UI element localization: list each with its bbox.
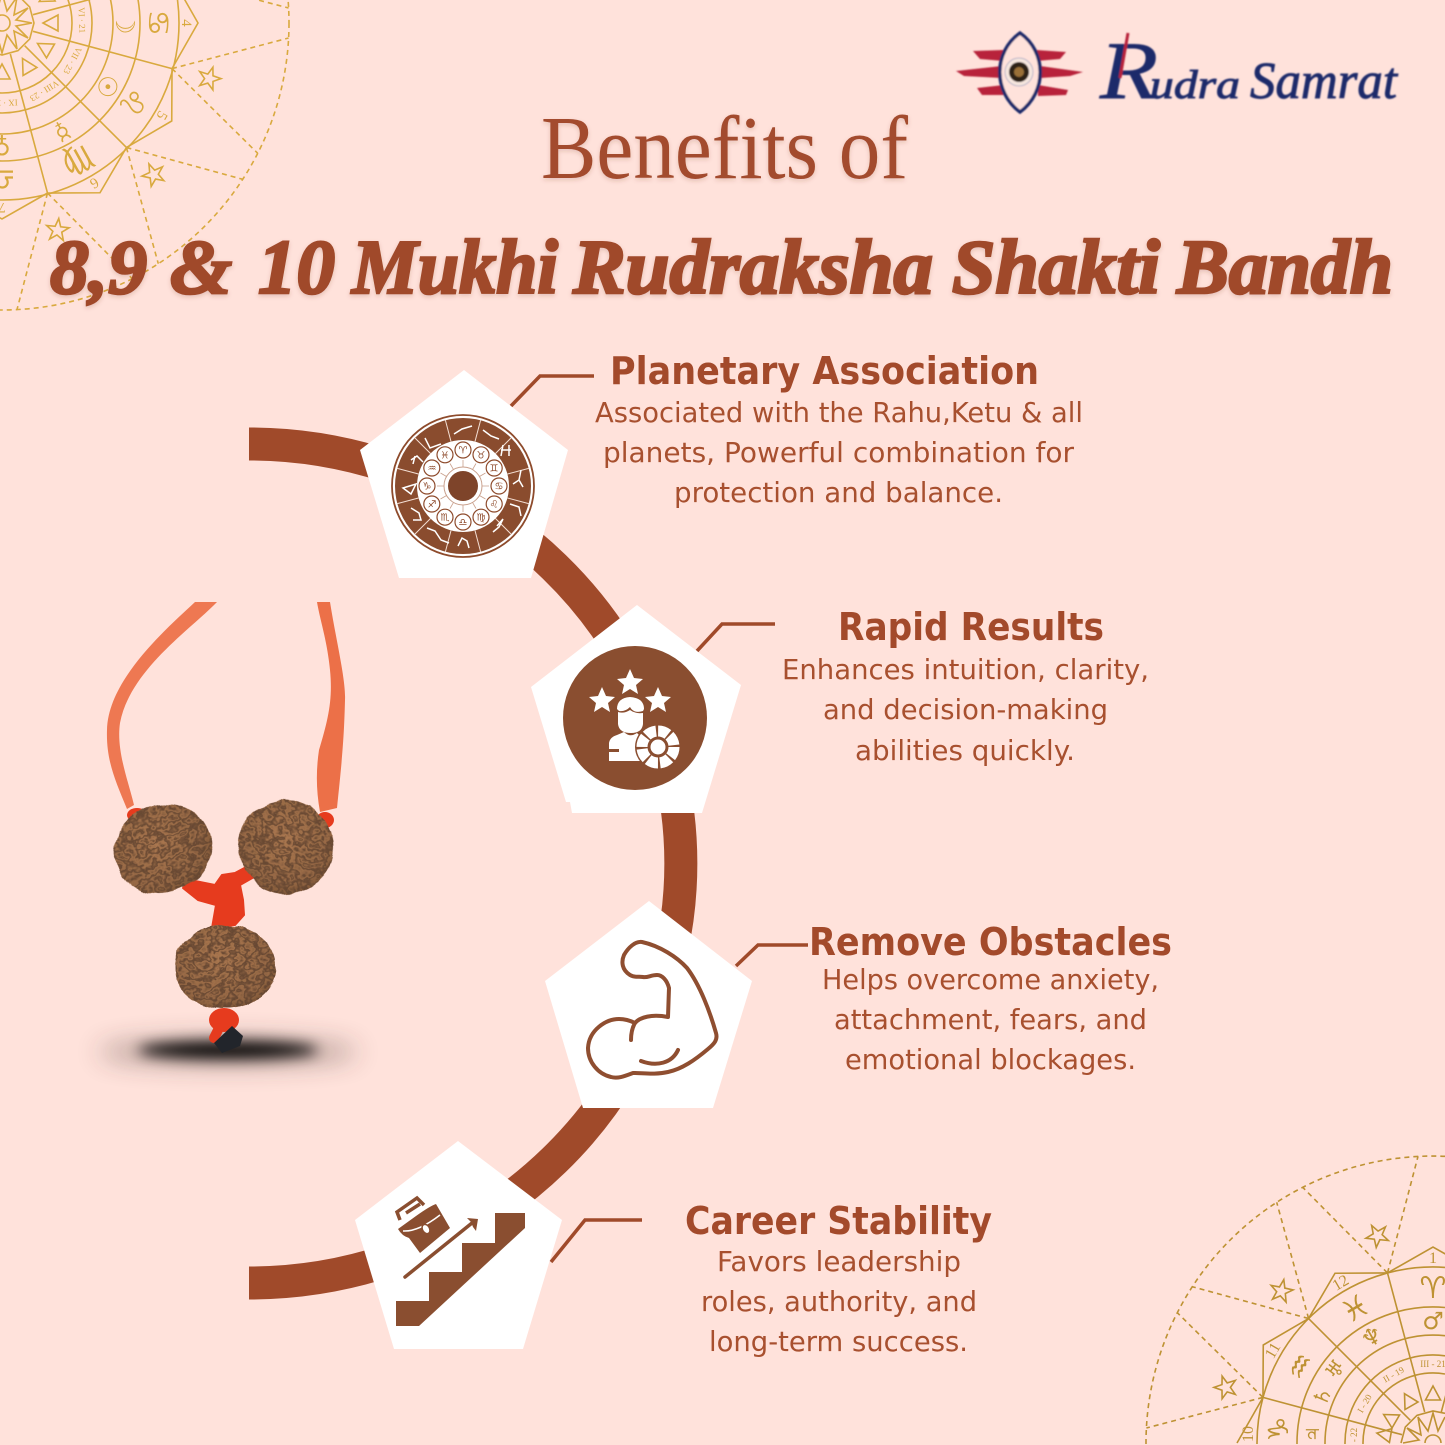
icon: zodiac wheel: ♐ bbox=[428, 500, 436, 510]
logo emblem bbox=[956, 33, 1083, 112]
logo: Rudra Samrat bbox=[956, 25, 1399, 116]
knots bbox=[127, 808, 334, 1038]
panel: Planetary Association bbox=[360, 349, 1083, 578]
icon: zodiac wheel: ♋ bbox=[495, 482, 503, 492]
icon: person with stars and gear bbox=[563, 646, 707, 790]
ground shadow bbox=[98, 1039, 358, 1065]
title line 2: Bandh bbox=[1176, 224, 1393, 310]
icon: zodiac wheel: ♊ bbox=[490, 464, 499, 474]
astrology wheel: top left: ☿ bbox=[49, 116, 75, 147]
astrology wheel: bottom right: II - 19 bbox=[1381, 1364, 1406, 1385]
heading: Remove Obstacles bbox=[809, 920, 1172, 964]
body text bbox=[701, 1245, 977, 1358]
astrology wheel: bottom right: ♑ bbox=[1262, 1416, 1295, 1442]
body text bbox=[595, 396, 1083, 509]
product photo: rudraksha bandh bbox=[98, 602, 358, 1065]
icon: zodiac wheel: ♑ bbox=[423, 482, 431, 492]
astrology wheel: top left: ♌ bbox=[109, 80, 157, 124]
logo wordmark: udra bbox=[1150, 62, 1240, 107]
astrology wheel: top left: VI · 21 bbox=[77, 7, 87, 33]
pentagon 4 bbox=[355, 1141, 562, 1349]
pentagon 1 bbox=[360, 370, 568, 578]
body text: Enhances intuition, clarity, bbox=[782, 653, 1149, 686]
cords bbox=[107, 602, 345, 812]
astrology wheel: bottom right: ♂ bbox=[1422, 1307, 1444, 1335]
icon: flexed arm bbox=[588, 942, 717, 1078]
icon: zodiac wheel bbox=[392, 415, 534, 557]
panel: Career Stability bbox=[355, 1141, 992, 1358]
astrology wheel: bottom right: 11 bbox=[1262, 1340, 1284, 1362]
astrology wheel: top left: ☽ bbox=[109, 11, 139, 35]
black tip bbox=[214, 1026, 243, 1053]
astrology wheel: top left bbox=[0, 0, 290, 311]
astrology wheel: bottom right: 1 bbox=[1429, 1250, 1437, 1267]
curved timeline arc bbox=[249, 444, 681, 1283]
body text: roles, authority, and bbox=[701, 1285, 977, 1318]
title line 2: Rudraksha bbox=[572, 224, 933, 310]
bead right bbox=[225, 786, 347, 908]
title line 2: Shakti bbox=[952, 224, 1161, 310]
panel: Remove Obstacles bbox=[545, 901, 1172, 1108]
astrology wheel: top left: 6 bbox=[86, 174, 101, 191]
astrology wheel: top left: 4 bbox=[178, 19, 194, 27]
heading: Planetary Association bbox=[610, 349, 1039, 393]
connector lines bbox=[511, 376, 808, 1262]
body text: Helps overcome anxiety, bbox=[822, 963, 1159, 996]
icon: zodiac wheel: ♉ bbox=[477, 450, 486, 461]
body text: Favors leadership bbox=[717, 1245, 961, 1278]
astrology wheel: bottom right bbox=[1145, 1155, 1445, 1444]
astrology wheel: top left: 5 bbox=[153, 108, 170, 122]
body text: protection and balance. bbox=[674, 476, 1003, 509]
title line 2: 8,9 bbox=[50, 224, 147, 310]
icon: zodiac wheel: ♓ bbox=[441, 450, 449, 461]
pentagon 3 bbox=[545, 901, 752, 1108]
icon: zodiac wheel: ♈ bbox=[459, 446, 468, 456]
panel: Rapid Results bbox=[531, 605, 1149, 813]
pentagon 2 bbox=[531, 605, 741, 813]
astrology wheel: bottom right: - 22 bbox=[1349, 1428, 1359, 1442]
icon: zodiac wheel: ♏ bbox=[441, 513, 450, 524]
body text: Associated with the Rahu,Ketu & all bbox=[595, 396, 1083, 429]
astrology wheel: top left: VII · 23 bbox=[61, 45, 84, 76]
astrology wheel: bottom right: ♒ bbox=[1279, 1346, 1323, 1387]
astrology wheel: bottom right: 12 bbox=[1330, 1272, 1352, 1295]
astrology wheel: bottom right: 10 bbox=[1240, 1426, 1257, 1442]
astrology wheel: bottom right: ♃ bbox=[1303, 1426, 1324, 1442]
title line 2: Mukhi bbox=[350, 224, 559, 310]
body text: attachment, fears, and bbox=[834, 1003, 1147, 1036]
body text: abilities quickly. bbox=[855, 734, 1075, 767]
astrology wheel: top left: ♍ bbox=[55, 135, 101, 185]
astrology wheel: bottom right: I - 20 bbox=[1355, 1392, 1374, 1414]
body text bbox=[782, 653, 1149, 767]
icon: zodiac wheel: ♎ bbox=[459, 518, 468, 528]
logo wordmark: Samrat bbox=[1250, 53, 1399, 110]
astrology wheel: bottom right: ♅ bbox=[1320, 1355, 1351, 1384]
astrology wheel: bottom right: ♆ bbox=[1356, 1320, 1388, 1355]
astrology wheel: top left: ☉ bbox=[88, 68, 125, 104]
title line 1: Benefits of bbox=[541, 99, 908, 198]
title line 2 bbox=[50, 224, 1393, 310]
astrology wheel: top left: VIII · 23 bbox=[28, 78, 61, 104]
body text: planets, Powerful combination for bbox=[603, 436, 1074, 469]
icon: zodiac wheel: ♒ bbox=[428, 464, 437, 474]
astrology wheel: bottom right: III - 21 bbox=[1420, 1359, 1445, 1369]
title line 2: 10 bbox=[258, 224, 335, 310]
astrology wheel: bottom right: ♄ bbox=[1308, 1383, 1337, 1409]
body text: and decision-making bbox=[823, 693, 1108, 726]
body text bbox=[822, 963, 1159, 1076]
icon: zodiac wheel: ♍ bbox=[477, 513, 486, 524]
astrology wheel: bottom right: ♓ bbox=[1335, 1287, 1376, 1331]
icon: briefcase, arrow and stairs bbox=[396, 1198, 525, 1326]
logo wordmark: R bbox=[1099, 25, 1158, 116]
bead left bbox=[100, 789, 226, 909]
logo wordmark bbox=[1099, 25, 1399, 116]
heading: Career Stability bbox=[685, 1199, 992, 1243]
bead bottom bbox=[174, 925, 276, 1009]
body text: emotional blockages. bbox=[845, 1043, 1136, 1076]
icon: zodiac wheel: ♌ bbox=[490, 500, 498, 510]
heading: Rapid Results bbox=[838, 605, 1104, 649]
body text: long-term success. bbox=[709, 1325, 968, 1358]
astrology wheel: top left: ♋ bbox=[140, 10, 175, 36]
title line 2: & bbox=[170, 224, 232, 310]
